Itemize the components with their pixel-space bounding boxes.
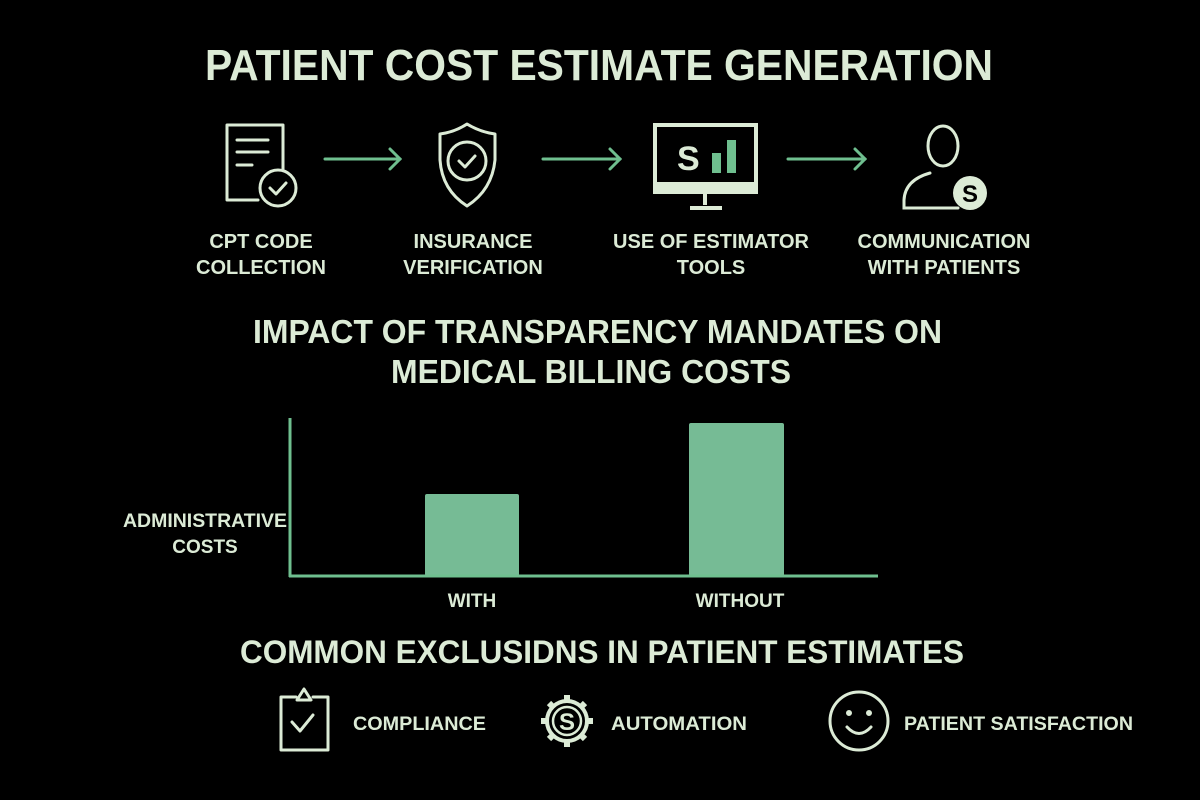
label: automation: AUTOMATION bbox=[611, 714, 747, 735]
step labels: VERIFICATION bbox=[403, 257, 543, 279]
icon: person with dollar: S bbox=[962, 181, 978, 208]
title: PATIENT COST ESTIMATE GENERATION bbox=[205, 41, 993, 90]
bar chart: COSTS bbox=[172, 537, 238, 558]
icon: gear with S bbox=[541, 695, 593, 747]
chart heading bbox=[253, 313, 942, 390]
step labels: WITH PATIENTS bbox=[868, 257, 1020, 279]
icon: clipboard check bbox=[281, 689, 328, 750]
bar chart: WITH bbox=[448, 591, 496, 612]
bar chart: WITHOUT bbox=[696, 591, 785, 612]
step labels: CPT CODE bbox=[209, 231, 313, 253]
step labels: INSURANCE bbox=[414, 231, 532, 253]
step labels: TOOLS bbox=[677, 257, 745, 279]
step labels: COLLECTION bbox=[196, 257, 326, 279]
bar chart: ADMINISTRATIVE bbox=[123, 511, 287, 532]
chart heading: MEDICAL BILLING COSTS bbox=[391, 353, 791, 390]
arrow 1 bbox=[325, 149, 400, 169]
step labels bbox=[196, 231, 1030, 279]
icon: person with dollar bbox=[904, 126, 987, 210]
arrow 2 bbox=[543, 149, 620, 169]
icon: monitor with chart: S bbox=[677, 140, 700, 178]
icon: smiley bbox=[830, 692, 888, 750]
label: compliance: COMPLIANCE bbox=[353, 714, 486, 735]
icon: document with check bbox=[227, 125, 296, 206]
label: patient satisfaction: PATIENT SATISFACTION bbox=[904, 714, 1133, 735]
icon: shield bbox=[440, 124, 495, 206]
icon: monitor with chart bbox=[655, 125, 756, 208]
step labels: USE OF ESTIMATOR bbox=[613, 231, 810, 253]
bar chart bbox=[123, 418, 878, 612]
exclusions heading: COMMON EXCLUSIDNS IN PATIENT ESTIMATES bbox=[240, 634, 964, 670]
icon: gear with S: S bbox=[559, 709, 575, 736]
arrow 3 bbox=[788, 149, 865, 169]
step labels: COMMUNICATION bbox=[858, 231, 1030, 253]
chart heading: IMPACT OF TRANSPARENCY MANDATES ON bbox=[253, 313, 942, 350]
